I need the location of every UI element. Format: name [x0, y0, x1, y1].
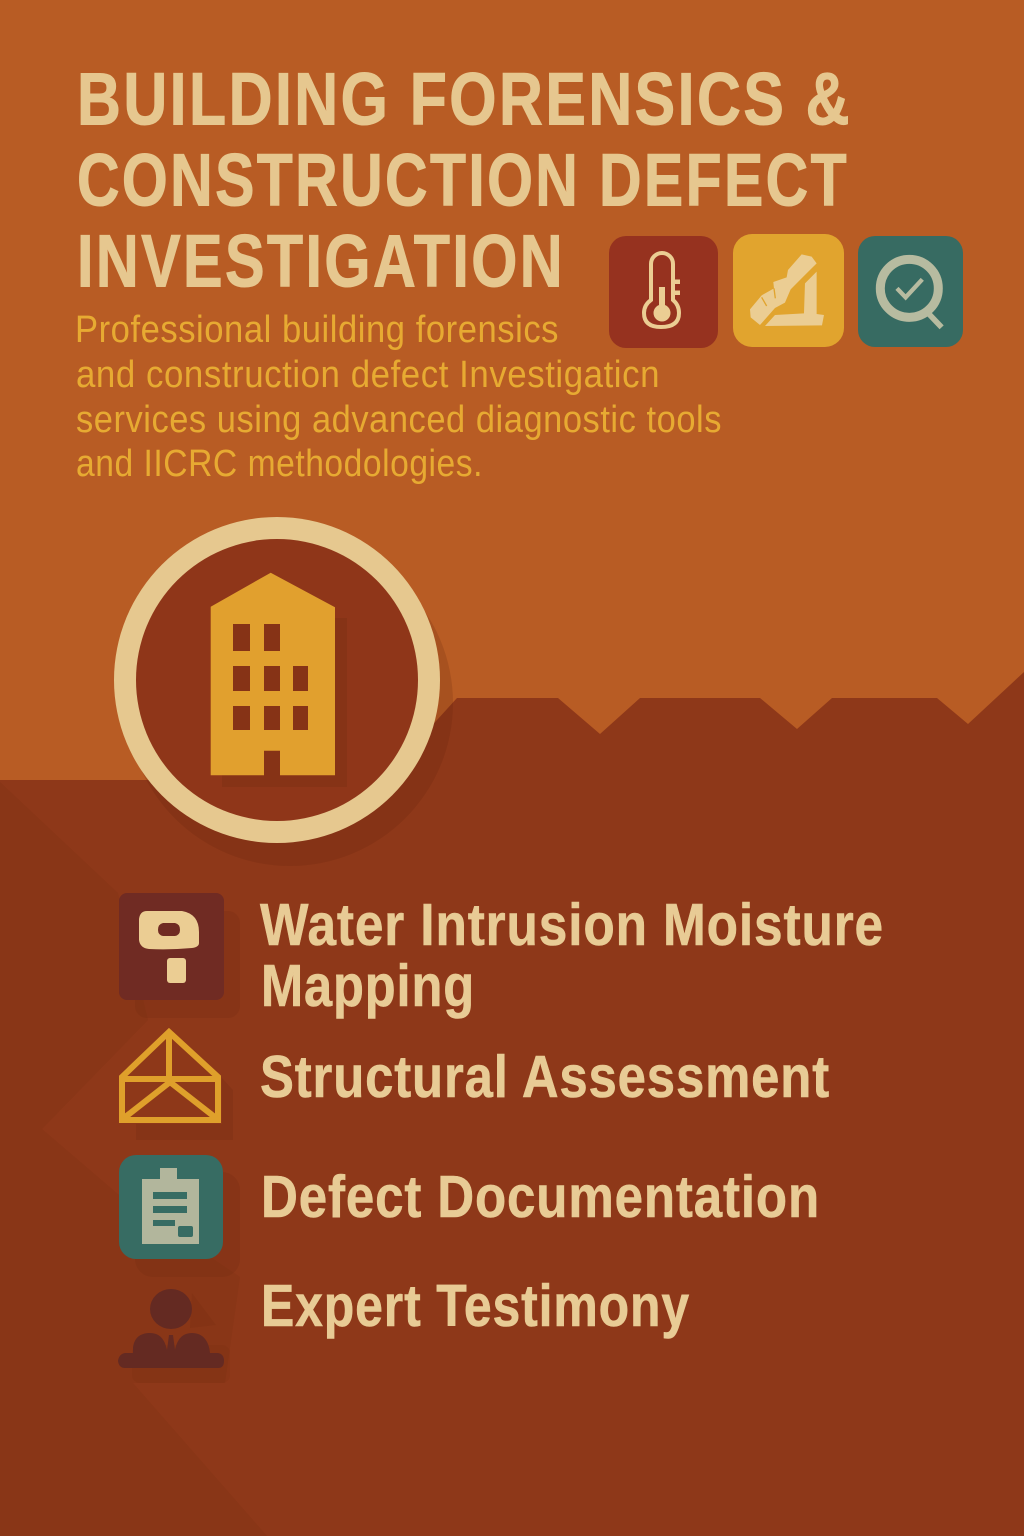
subtitle text block: and construction defect Investigaticn: [76, 354, 660, 396]
title: BUILDING FORENSICS &: [77, 58, 852, 140]
subtitle text block: Professional building forensics: [75, 309, 559, 351]
subtitle text block: [75, 309, 722, 485]
title: CONSTRUCTION DEFECT: [77, 138, 849, 222]
icon: building: [211, 573, 335, 775]
list item: expert testimony heading: Expert Testimony: [261, 1273, 690, 1339]
title: INVESTIGATION: [77, 220, 565, 302]
subtitle text block: and IICRC methodologies.: [76, 443, 483, 485]
list item: water intrusion icon: [119, 893, 240, 1018]
icon: ruler and set square tile: [733, 234, 844, 347]
hero badge: building in circle: [114, 517, 453, 866]
list item: water intrusion heading: [260, 892, 884, 1019]
title: [77, 58, 852, 302]
list item: water intrusion heading: Water Intrusion Moisture: [260, 892, 884, 958]
list item: expert testimony icon: [118, 1289, 230, 1383]
background: dark skyline lower area: [0, 672, 1024, 1536]
list item: structural frame icon: [122, 1032, 233, 1140]
icon: magnifier with check tile: [858, 236, 963, 347]
list item: documentation icon: [119, 1155, 240, 1277]
background: shaded left facet: [0, 782, 267, 1536]
subtitle text block: services using advanced diagnostic tools: [76, 399, 722, 441]
list item: structural assessment heading: Structural Assessment: [260, 1044, 830, 1110]
icon: thermometer tile: [609, 236, 718, 348]
list item: defect documentation heading: Defect Documentation: [261, 1164, 820, 1230]
list item: water intrusion heading: Mapping: [261, 953, 475, 1019]
